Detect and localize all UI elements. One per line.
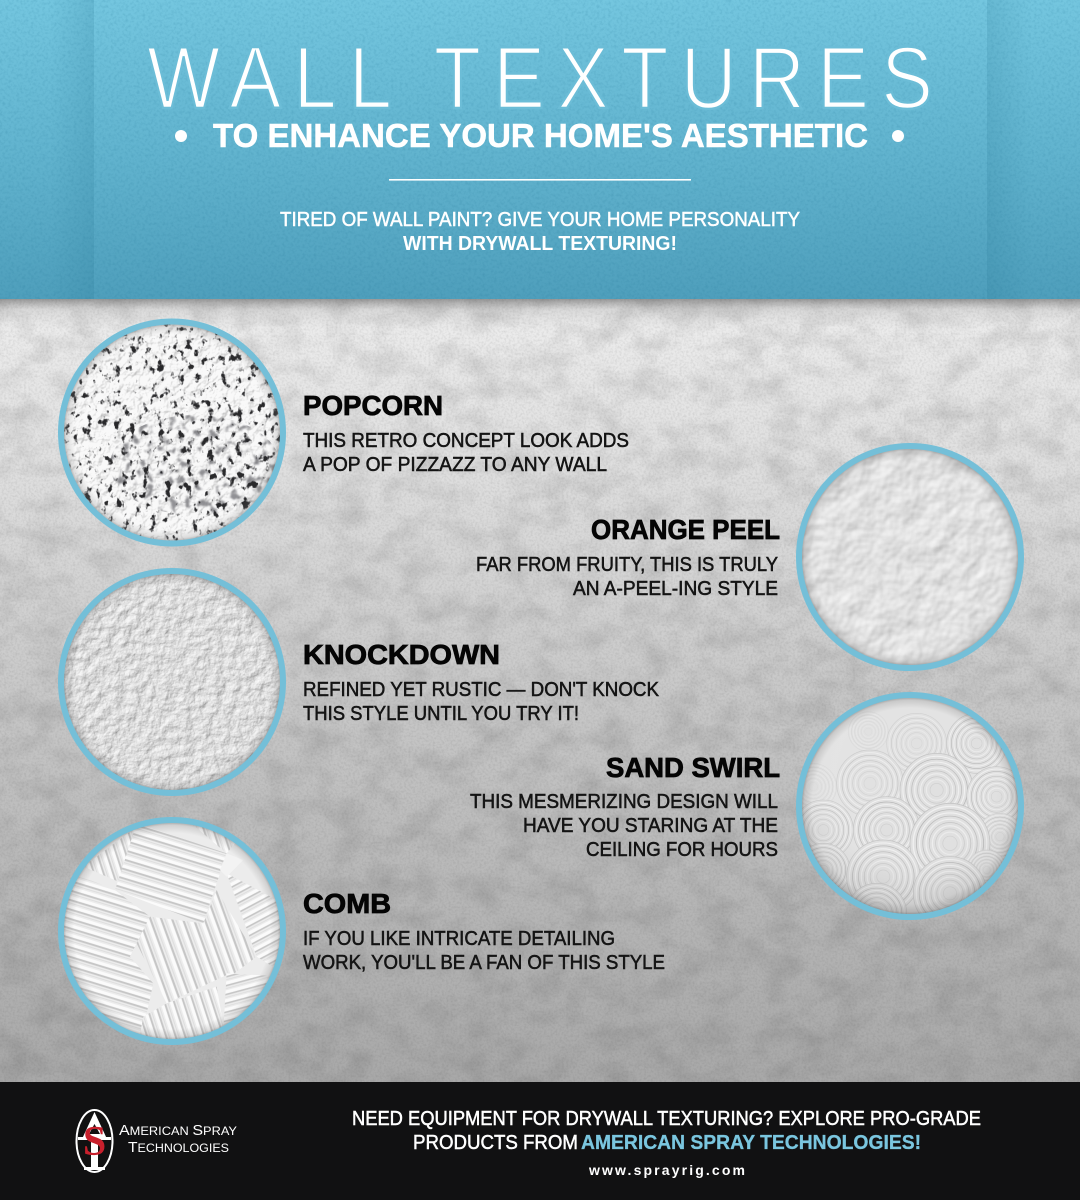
call to action text: NEED EQUIPMENT FOR DRYWALL TEXTURING? EXPLORE PRO-GRADE xyxy=(352,1108,981,1130)
description: comb: IF YOU LIKE INTRICATE DETAILING xyxy=(303,928,615,950)
panel: comb xyxy=(57,817,665,1045)
heading: sand swirl: SAND SWIRL xyxy=(606,752,780,783)
intro text xyxy=(280,209,800,255)
heading: comb: COMB xyxy=(303,888,391,919)
description: knockdown xyxy=(303,679,660,725)
texture circle: sand swirl xyxy=(796,692,1024,920)
title: WALL TEXTURES xyxy=(147,28,933,127)
description: orange peel: FAR FROM FRUITY, THIS IS TRULY xyxy=(476,554,778,576)
intro text: TIRED OF WALL PAINT? GIVE YOUR HOME PERSONALITY xyxy=(280,209,800,231)
texture circle: popcorn xyxy=(58,318,286,546)
panel: orange peel xyxy=(476,443,1024,671)
panel: knockdown xyxy=(58,568,660,796)
subtitle with bullets: TO ENHANCE YOUR HOME'S AESTHETIC xyxy=(213,117,868,154)
call to action text xyxy=(352,1108,981,1154)
panel: sand swirl xyxy=(470,692,1027,943)
divider line xyxy=(389,179,691,181)
icon: american spray technologies logo: S xyxy=(83,1119,106,1165)
description: popcorn: A POP OF PIZZAZZ TO ANY WALL xyxy=(303,454,607,476)
heading: orange peel: ORANGE PEEL xyxy=(591,514,780,545)
description: sand swirl: HAVE YOU STARING AT THE xyxy=(523,815,778,837)
description: orange peel xyxy=(476,554,778,600)
footer bar xyxy=(0,1082,1080,1200)
texture circle: orange peel xyxy=(796,443,1024,671)
intro text: WITH DRYWALL TEXTURING! xyxy=(403,233,677,255)
heading: popcorn: POPCORN xyxy=(303,390,443,421)
panel: popcorn xyxy=(58,318,629,546)
logo wordmark: TECHNOLOGIES xyxy=(128,1139,229,1156)
header banner xyxy=(0,0,1080,299)
description: comb xyxy=(303,928,665,974)
call to action text: PRODUCTS FROM xyxy=(413,1132,578,1154)
description: popcorn: THIS RETRO CONCEPT LOOK ADDS xyxy=(303,430,629,452)
texture circle: knockdown xyxy=(58,568,286,796)
call to action text: AMERICAN SPRAY TECHNOLOGIES! xyxy=(581,1132,921,1154)
description: sand swirl xyxy=(470,791,778,861)
wall background panel xyxy=(0,299,1080,1082)
icon: american spray technologies logo xyxy=(76,1110,112,1172)
heading: knockdown: KNOCKDOWN xyxy=(303,639,500,670)
description: comb: WORK, YOU'LL BE A FAN OF THIS STYLE xyxy=(303,952,665,974)
description: sand swirl: THIS MESMERIZING DESIGN WILL xyxy=(470,791,778,813)
logo wordmark xyxy=(119,1122,237,1156)
texture circle: comb xyxy=(57,817,286,1045)
description: popcorn xyxy=(303,430,629,476)
description: sand swirl: CEILING FOR HOURS xyxy=(586,839,778,861)
logo wordmark: AMERICAN SPRAY xyxy=(119,1122,237,1139)
description: knockdown: THIS STYLE UNTIL YOU TRY IT! xyxy=(303,703,579,725)
description: orange peel: AN A-PEEL-ING STYLE xyxy=(573,578,778,600)
website url: www.sprayrig.com xyxy=(588,1162,745,1178)
description: knockdown: REFINED YET RUSTIC — DON'T KNOCK xyxy=(303,679,660,701)
